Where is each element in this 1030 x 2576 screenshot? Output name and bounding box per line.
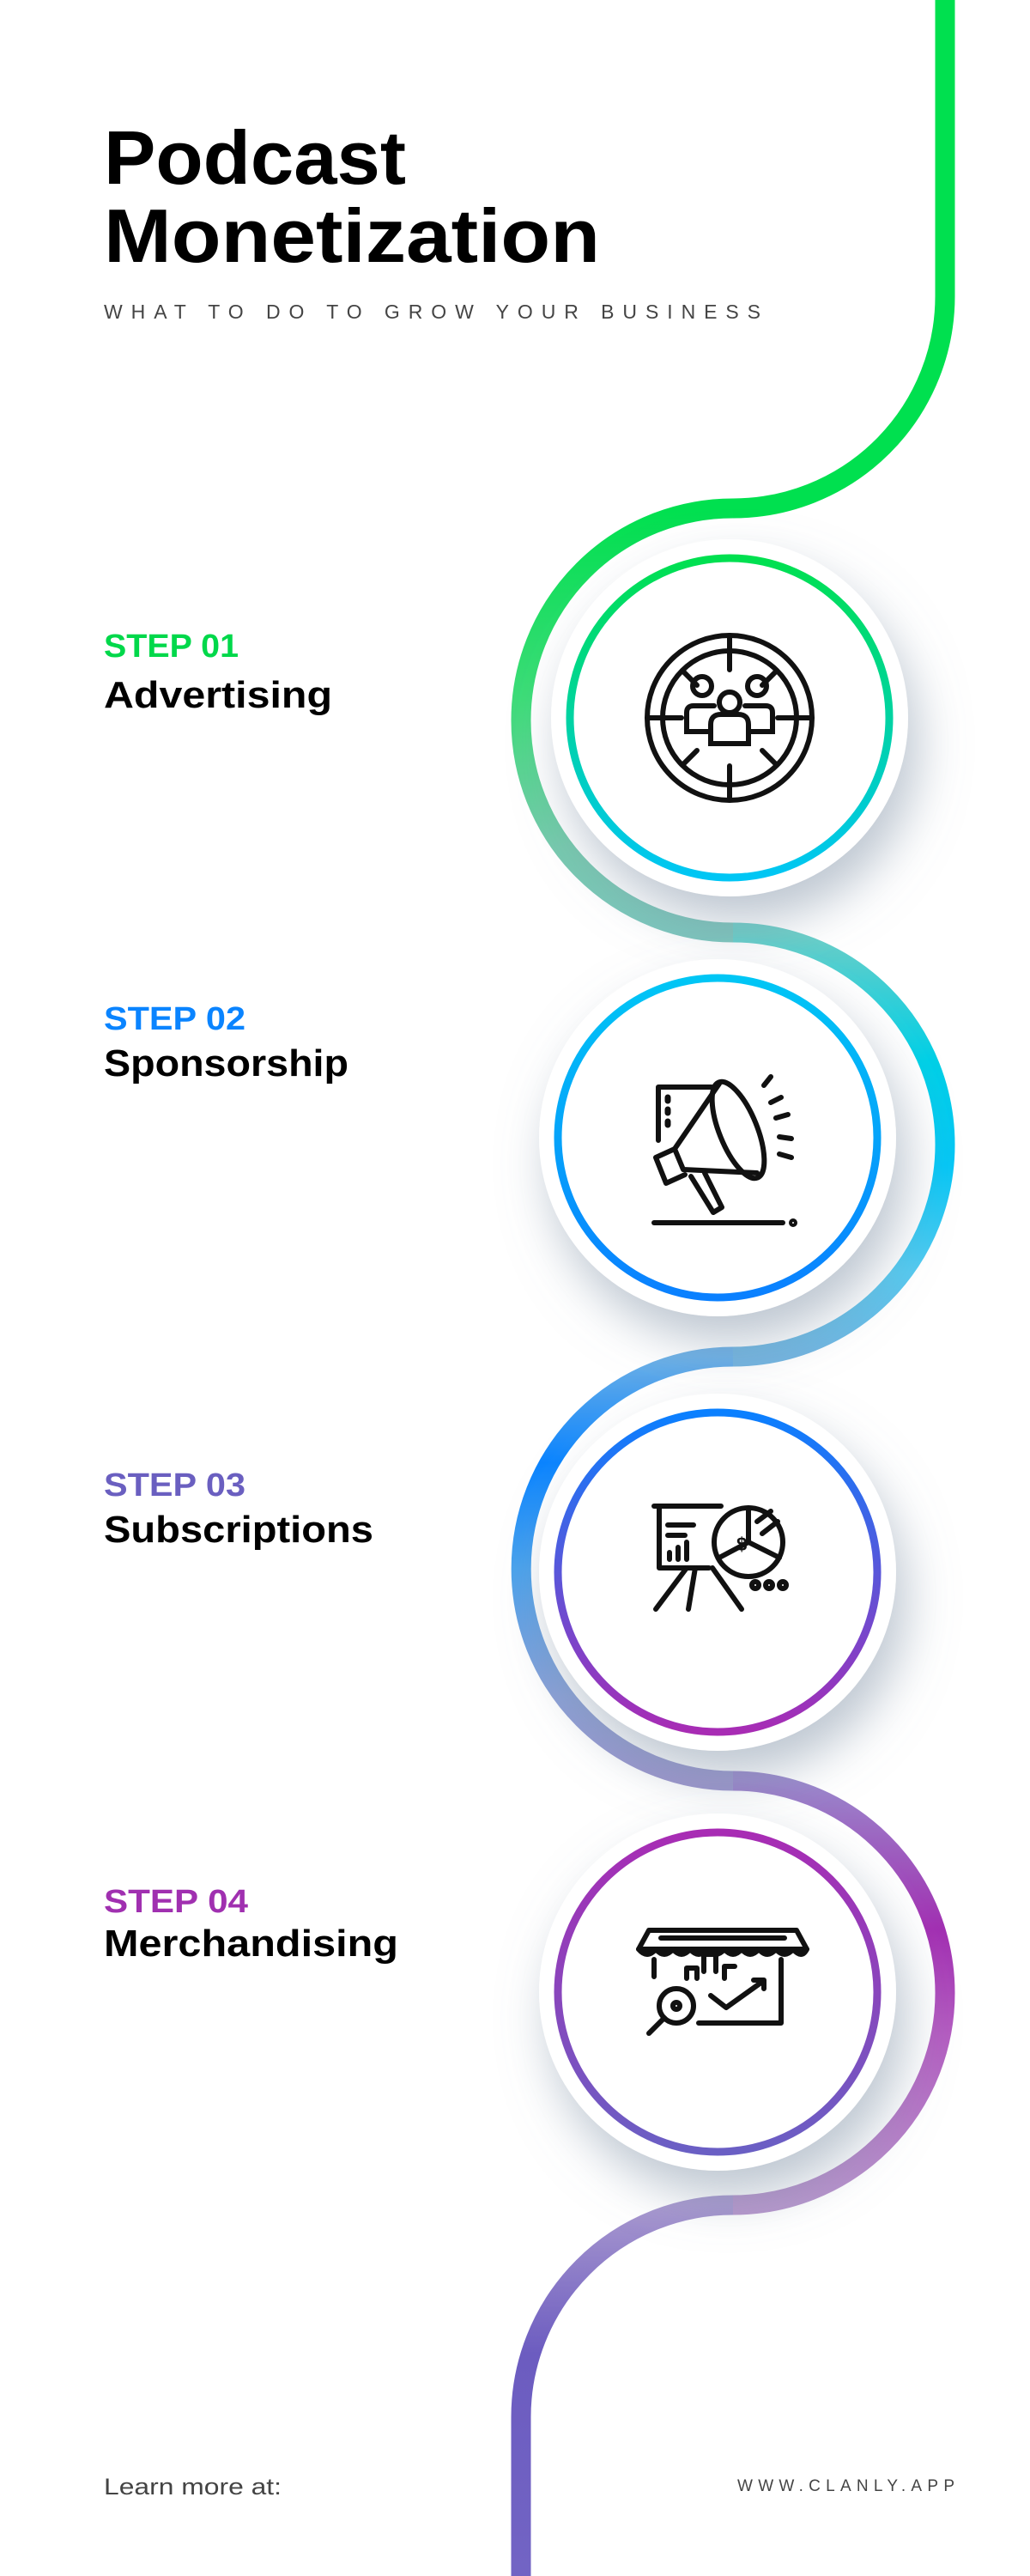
circle 1: advertising xyxy=(551,539,908,896)
step 04 label: STEP 04 xyxy=(104,1884,248,1920)
footer: learn more: Learn more at: xyxy=(104,2474,282,2500)
icon: shop with chart xyxy=(639,1930,807,2033)
subtitle: WHAT TO DO TO GROW YOUR BUSINESS xyxy=(104,301,760,323)
step 02 label: Sponsorship xyxy=(104,1042,348,1084)
footer: website: WWW.CLANLY.APP xyxy=(737,2477,954,2495)
step 02 label xyxy=(104,1001,348,1084)
step 03 label: Subscriptions xyxy=(104,1509,373,1551)
path: winding gradient line xyxy=(521,0,945,2576)
step 04 label xyxy=(104,1884,398,1965)
step 01 label: STEP 01 xyxy=(104,629,239,665)
circle 2: sponsorship xyxy=(539,959,896,1316)
step 02 label: STEP 02 xyxy=(104,1001,245,1037)
circle 4: merchandising xyxy=(539,1814,896,2171)
title: Monetization xyxy=(104,193,600,278)
title xyxy=(104,115,600,278)
step 04 label: Merchandising xyxy=(104,1923,398,1965)
icon: presentation pie chart: $ xyxy=(736,1534,747,1555)
icon: presentation pie chart xyxy=(654,1506,786,1609)
step 03 label: STEP 03 xyxy=(104,1467,245,1504)
title: Podcast xyxy=(104,115,406,200)
icon: target audience xyxy=(647,635,812,800)
step 01 label xyxy=(104,629,332,716)
circle 3: subscriptions xyxy=(539,1394,896,1751)
icon: megaphone xyxy=(654,1075,795,1224)
step 03 label xyxy=(104,1467,373,1551)
step 01 label: Advertising xyxy=(104,674,332,716)
